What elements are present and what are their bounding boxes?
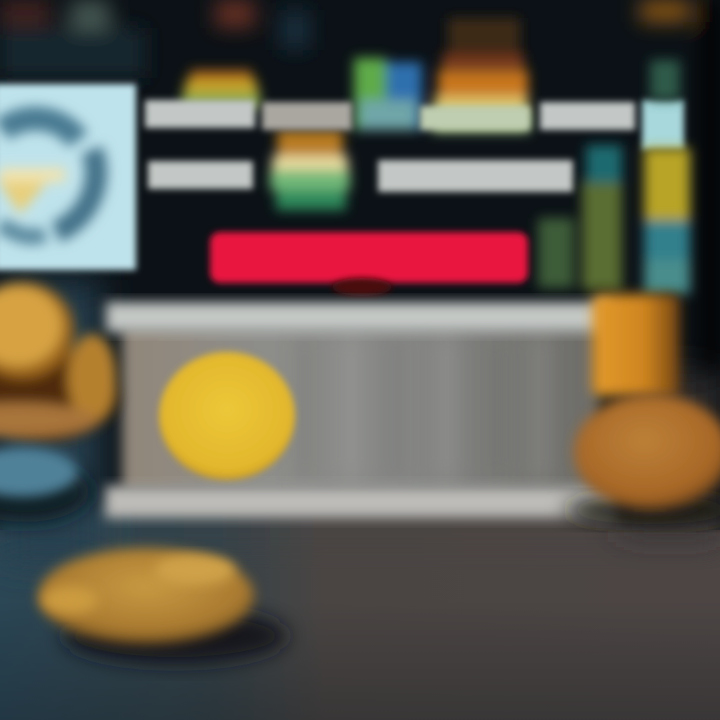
- box: white top rim: [106, 302, 611, 332]
- text band: blurred white headline lower: [148, 160, 573, 192]
- bar stack: blue and green: [354, 58, 422, 130]
- banner: red bar: [210, 232, 528, 296]
- icon: blue disc, left: [0, 447, 90, 522]
- text band: blurred white headline upper: [145, 100, 684, 150]
- background: table surface: [0, 280, 720, 720]
- icon: stacked gold coins, left: [0, 282, 118, 443]
- icon: orange cylinder: [592, 294, 680, 396]
- box: white bottom rim: [105, 486, 617, 518]
- icon: yellow coin: [159, 352, 295, 480]
- icon: golden bun, right: [565, 394, 720, 524]
- chart: rainbow bar stacks: [182, 18, 530, 210]
- bar stack: centre low: [270, 130, 350, 210]
- chart: green and yellow bars: [538, 60, 690, 294]
- box: grey striped body: [105, 302, 617, 518]
- bar stack: right tall: [432, 18, 530, 132]
- top row: dim background colours: [0, 0, 720, 370]
- icon: gold coin pile, bottom: [38, 548, 287, 664]
- panel: light blue chart card: [0, 84, 136, 270]
- shadow: dark red notch: [332, 278, 392, 296]
- bar stack: left: [182, 70, 260, 108]
- icon: circular arrows: [0, 119, 96, 237]
